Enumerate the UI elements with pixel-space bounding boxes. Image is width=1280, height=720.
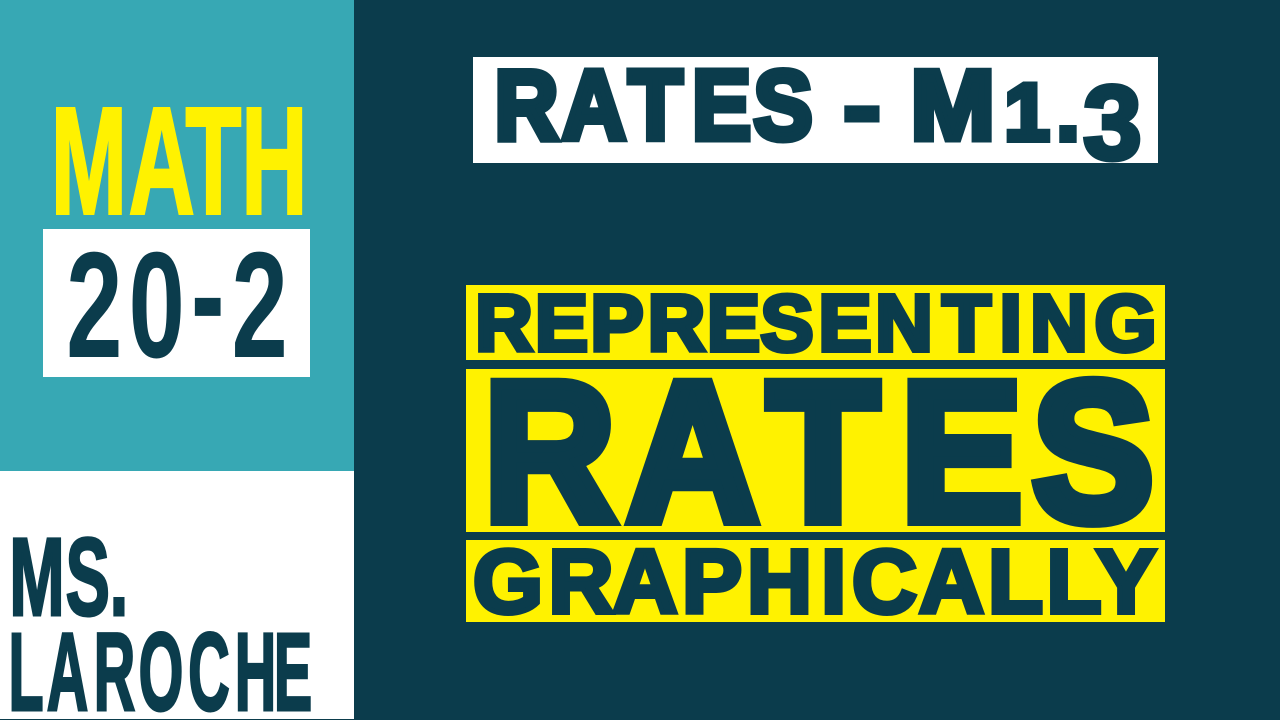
title: rates module: - <box>843 49 881 162</box>
panel: course <box>0 0 354 471</box>
banner: graphically: GRAPHICALLY <box>473 532 1156 632</box>
title: rates module: . <box>1057 68 1079 158</box>
text: ms: MS. <box>9 517 128 639</box>
title: rates module: 1 <box>1004 68 1050 158</box>
heading: math: MATH <box>51 75 307 246</box>
badge: course number: 20-2 <box>66 211 288 390</box>
title: rates module: M <box>911 51 995 161</box>
banner: rates: RATES <box>484 342 1154 563</box>
title: rates module: RATES <box>495 51 812 160</box>
panel: teacher name <box>0 471 354 720</box>
title: rates module: 3 <box>1083 65 1142 182</box>
title: rates module <box>473 49 1158 182</box>
banner: representing: REPRESENTING <box>475 278 1156 367</box>
